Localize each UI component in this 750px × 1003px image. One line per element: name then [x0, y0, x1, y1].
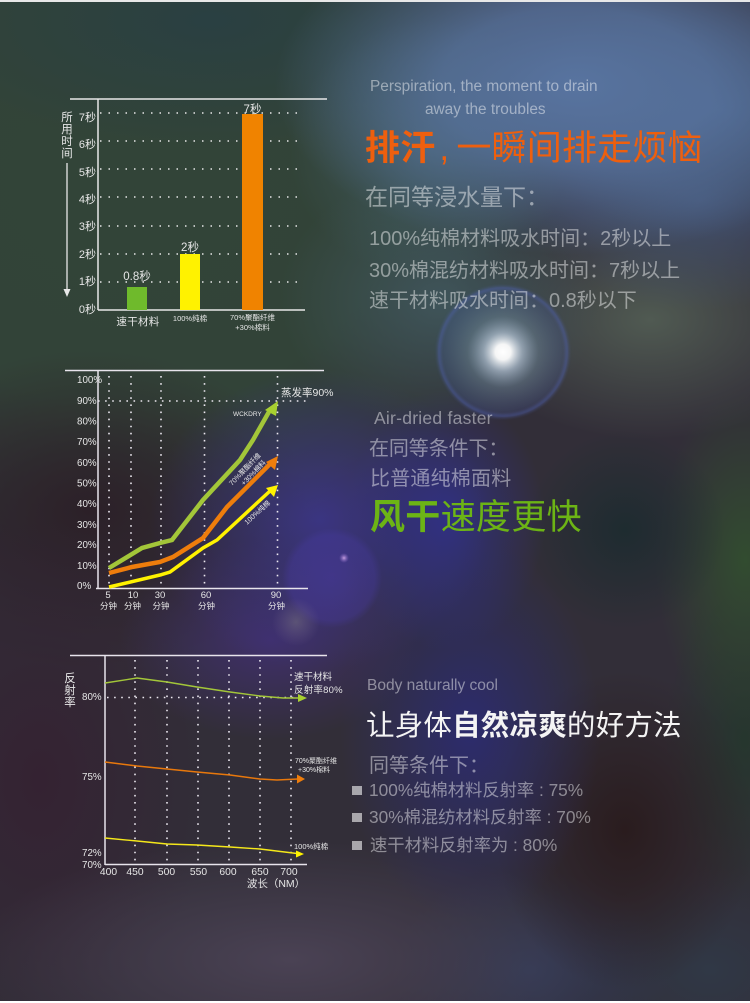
- chart 3 y tick labels: 72%: [82, 848, 102, 859]
- section 2 body text: 比普通纯棉面料: [370, 468, 511, 490]
- chart 1 y tick labels: 3秒: [79, 219, 96, 233]
- chart 2 line labels: 70%聚酯纤维: [227, 451, 263, 487]
- chart 3 line labels: 70%聚酯纤维: [295, 756, 337, 765]
- chart 1 y tick labels: [79, 110, 96, 316]
- chart 3 y tick labels: 75%: [82, 772, 102, 783]
- chart 2 y tick labels: 70%: [77, 437, 97, 448]
- chart 1 y tick labels: 2秒: [79, 247, 96, 261]
- chart 2 x labels: [100, 590, 285, 611]
- section 3 heading: 让身体自然凉爽的好方法: [366, 710, 682, 742]
- chart 3 x labels: 650: [251, 867, 269, 878]
- chart 2 line labels: 蒸发率90%: [281, 386, 334, 399]
- chart 2 line labels: +30%棉料: [239, 458, 268, 487]
- chart 2 y tick labels: 30%: [77, 520, 97, 531]
- chart 2 x labels: 10: [128, 590, 138, 601]
- chart 1 x labels: 70%聚酯纤维: [230, 312, 276, 322]
- section 1 data list: 速干材料吸水时间：0.8秒以下: [369, 290, 637, 312]
- chart 3 x labels: 500: [158, 867, 175, 878]
- chart 2 yellow line: [109, 485, 278, 587]
- section 1 data list: [369, 228, 680, 312]
- section 3 lead text: 同等条件下：: [369, 755, 489, 777]
- chart 2 y tick labels: 0%: [77, 581, 91, 592]
- section 1 english subtitle: away the troubles: [425, 101, 546, 118]
- chart 3 x labels: 400: [100, 867, 117, 878]
- section 3 bullet list: 30%棉混纺材料反射率 : 70%: [369, 807, 591, 827]
- chart 2 y tick labels: 80%: [77, 416, 97, 428]
- chart 2 y tick labels: 50%: [77, 478, 97, 490]
- section 3 bullet list: 100%纯棉材料反射率 : 75%: [369, 780, 583, 800]
- chart 2 y tick labels: [77, 375, 102, 592]
- chart 2 line labels: [227, 386, 334, 526]
- chart 1 axes: [70, 99, 327, 310]
- chart 1 y tick labels: 5秒: [79, 165, 96, 179]
- chart 3 x labels: 450: [126, 867, 144, 878]
- chart 1 y tick labels: 0秒: [79, 302, 96, 316]
- chart 2 green line: [109, 401, 278, 568]
- chart 1 y tick labels: 6秒: [79, 137, 96, 151]
- chart 1 y axis title and arrow: 时: [61, 135, 73, 148]
- chart 2 line labels: 100%纯棉: [242, 498, 272, 526]
- chart 2 x labels: 60: [201, 590, 211, 601]
- lens flare: [272, 287, 568, 646]
- chart 3 x labels: 700: [280, 867, 298, 878]
- chart 3 axes: [70, 655, 327, 865]
- chart 3 x labels: 550: [190, 867, 207, 878]
- chart 3 orange line: [105, 762, 305, 784]
- chart 2 orange line: [109, 456, 278, 573]
- chart 2 x labels: 分钟: [100, 601, 117, 611]
- section 3 english subtitle: Body naturally cool: [367, 677, 498, 694]
- chart 3 line labels: 100%纯棉: [294, 841, 328, 851]
- chart 2 x labels: 30: [155, 590, 165, 601]
- section 2 lead text: 在同等条件下：: [369, 438, 508, 460]
- chart 1 x labels: +30%棉料: [235, 322, 270, 332]
- chart 1 y axis title and arrow: 所: [61, 111, 73, 124]
- chart 3 y tick labels: [82, 692, 102, 871]
- chart 2 y tick labels: 100%: [77, 375, 102, 386]
- section 2 heading: 风干速度更快: [370, 498, 582, 537]
- section 1 english subtitle: [370, 78, 598, 118]
- chart 2 x labels: 分钟: [124, 601, 141, 611]
- chart 2 axes: [65, 370, 324, 589]
- chart 2 y tick labels: 40%: [77, 499, 97, 510]
- chart 3 line labels: +30%棉料: [298, 765, 330, 774]
- chart 3 x labels: [100, 867, 305, 890]
- chart 3 y tick labels: 70%: [82, 860, 102, 871]
- chart 3 x labels: 600: [219, 867, 237, 878]
- chart 3 y title: 射: [64, 683, 76, 697]
- chart 1 x labels: 100%纯棉: [173, 313, 207, 323]
- chart 2 x labels: 分钟: [198, 601, 215, 611]
- chart 1 y axis title and arrow: 用: [61, 124, 73, 136]
- chart 3 yellow line: [105, 838, 304, 858]
- chart 1 y axis title and arrow: [61, 111, 73, 297]
- chart 3 green line: [105, 678, 307, 702]
- chart 2 y tick labels: 90%: [77, 396, 97, 407]
- section 3 bullet list: [352, 780, 591, 855]
- chart: reflectance line chart: [64, 655, 343, 890]
- chart 1 bar values: [123, 102, 261, 283]
- chart 3 line labels: [294, 671, 343, 851]
- chart 3 line labels: 速干材料: [294, 671, 333, 683]
- chart 2 x labels: 90: [271, 590, 281, 601]
- chart 3 y title: 率: [64, 695, 76, 709]
- chart 3 y title: [64, 672, 76, 709]
- chart 1 bars: [127, 114, 263, 310]
- chart 2 y tick labels: 60%: [77, 458, 97, 469]
- chart 1 y tick labels: 1秒: [79, 274, 96, 288]
- section 1 data list: 30%棉混纺材料吸水时间：7秒以上: [369, 260, 680, 282]
- chart: evaporation rate line chart: [65, 370, 334, 611]
- chart 3 y tick labels: 80%: [82, 692, 102, 703]
- section 2 english subtitle: Air-dried faster: [374, 408, 493, 428]
- chart 1 x labels: 速干材料: [116, 315, 160, 328]
- chart 2 x labels: 分钟: [268, 601, 285, 611]
- chart 2 y tick labels: 10%: [77, 561, 97, 572]
- chart 2 x labels: 5: [105, 590, 111, 601]
- section 1 heading: 排汗,一瞬间排走烦恼: [365, 129, 703, 168]
- chart 2 line labels: WCKDRY: [233, 411, 262, 418]
- chart 1 bar values: 2秒: [181, 240, 199, 254]
- chart 3 x labels: 波长（NM）: [247, 877, 305, 890]
- chart 1 bar values: 0.8秒: [123, 269, 151, 283]
- chart 2 x labels: 分钟: [152, 601, 170, 611]
- chart 1 x labels: [116, 312, 276, 332]
- chart 1 y tick labels: 7秒: [79, 110, 96, 124]
- chart 3 y title: 反: [64, 672, 76, 685]
- section 1 english subtitle: Perspiration, the moment to drain: [370, 78, 598, 95]
- chart 1 bar values: 7秒: [244, 102, 261, 116]
- section 3 bullet list: 速干材料反射率为 : 80%: [370, 835, 557, 855]
- section 1 lead text: 在同等浸水量下：: [365, 184, 549, 210]
- chart 3 line labels: 反射率80%: [294, 684, 343, 696]
- chart 1 y tick labels: 4秒: [79, 192, 96, 206]
- chart 1 y axis title and arrow: 间: [61, 147, 73, 160]
- chart 2 y tick labels: 20%: [77, 540, 97, 551]
- section 1 data list: 100%纯棉材料吸水时间：2秒以上: [369, 228, 671, 250]
